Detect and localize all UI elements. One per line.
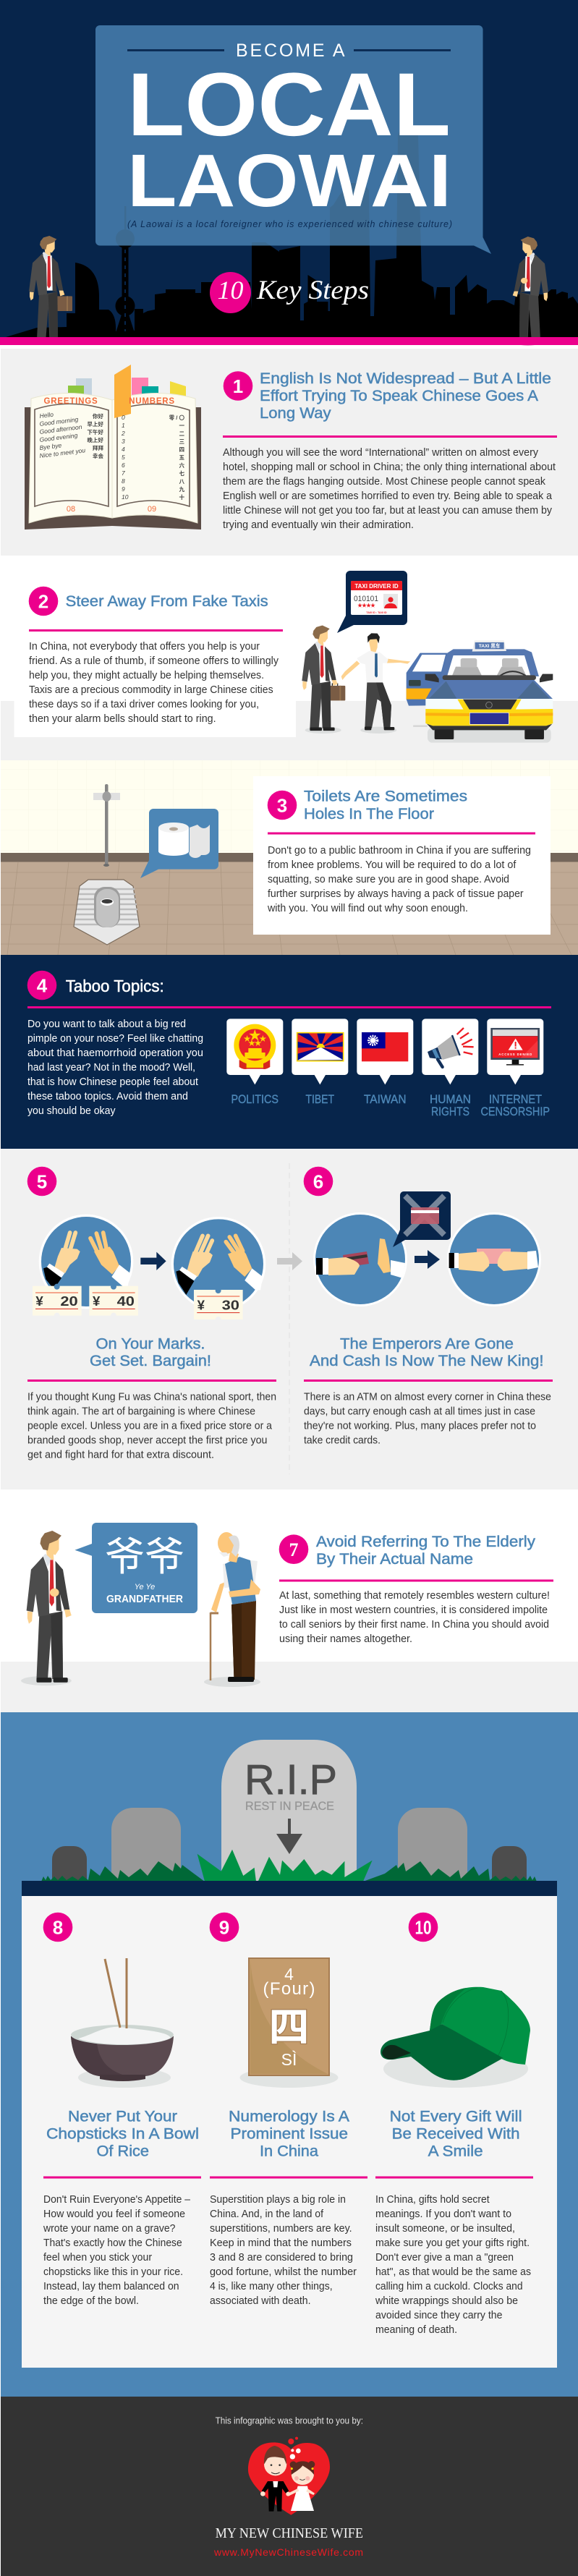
left businessman	[29, 236, 72, 344]
body: step 9: Keep in mind that the numbers	[210, 2237, 352, 2249]
card: access denied monitor	[487, 1019, 543, 1084]
price tags 20 and 40: ¥	[35, 1293, 43, 1309]
icon: phrase book: 7	[122, 469, 125, 477]
panel: step 3	[1, 760, 578, 955]
step number 10: 10	[415, 1917, 431, 1939]
heading: step 6: The Emperors Are Gone	[340, 1336, 514, 1353]
heading: step 5	[90, 1336, 211, 1369]
body: step 8: the edge of the bowl.	[43, 2295, 139, 2307]
body: step 2: Taxis are a precious commodity in large Chinese cities	[29, 684, 273, 696]
main tombstone: R.I.P	[245, 1756, 337, 1803]
body: step 10: avoided since they carry the	[375, 2309, 502, 2321]
step number 3	[268, 791, 297, 820]
body: step 2: In China, not everybody that offers you help is your	[29, 640, 260, 652]
icon: phrase book: 09	[148, 505, 156, 514]
body: step 8: feel when you stick your	[43, 2251, 152, 2263]
icon: phrase book: 0	[122, 414, 125, 421]
topic labels: RIGHTS	[431, 1105, 469, 1118]
body: step 8: wrote your name on a grave?	[43, 2222, 176, 2235]
icon: phrase book: GREETINGS	[44, 397, 98, 406]
body: step 8: How would you feel if someone	[43, 2208, 185, 2220]
topic labels: CENSORSHIP	[480, 1105, 550, 1118]
body: step 5: get and fight hard for that extra discount.	[27, 1449, 214, 1461]
illustration: cash exchange	[447, 1212, 541, 1306]
counter offer circle	[171, 1217, 265, 1322]
heading: step 6	[310, 1336, 544, 1369]
body: step 6: There is an ATM on almost every corner in China these	[304, 1391, 551, 1403]
body: step 1: Although you will see the word “International” written on almost every	[223, 446, 538, 459]
young man	[21, 1531, 72, 1686]
topic labels: TIBET	[305, 1092, 334, 1106]
main tombstone: REST IN PEACE	[245, 1799, 334, 1813]
icon: number four card: 四	[269, 1995, 310, 2054]
body: step 7: using their names altogether.	[279, 1633, 412, 1645]
body: step 3: squatting, so make sure you are in good shape. Avoid	[268, 873, 509, 885]
card: politics emblem: ★	[244, 1036, 251, 1044]
body: step 9: superstitions, numbers are key.	[210, 2222, 352, 2235]
body: step 6: days, but carry enough cash at all times just in case	[304, 1406, 535, 1418]
body: step 9: associated with death.	[210, 2295, 311, 2307]
price tags 20 and 40	[33, 1284, 138, 1319]
panel: step 4 taboo topics	[1, 955, 578, 1149]
title	[127, 41, 451, 222]
heading: step 7	[316, 1534, 536, 1568]
body: step 9: China. And, in the land of	[210, 2208, 324, 2220]
body: step 1	[223, 446, 556, 531]
step number 2: 2	[38, 590, 48, 612]
body: step 1: hotel, shopping mall or school in China; the only thing international about	[223, 461, 556, 473]
speech bubble: grandfather: Ye Ye	[135, 1583, 155, 1591]
body: step 1: little Chinese will not get you too far, but at least you can amuse them by	[223, 504, 552, 517]
old man	[204, 1532, 260, 1687]
body: step 4: these taboo topics. Avoid them and	[27, 1090, 188, 1102]
speech bubble: no credit cards	[393, 1191, 451, 1247]
heading: step 7: By Their Actual Name	[316, 1551, 473, 1568]
speech bubble: grandfather	[75, 1523, 197, 1613]
body: step 9	[210, 2193, 357, 2307]
heading: step 8: Of Rice	[97, 2143, 149, 2160]
step number 9: 9	[219, 1917, 229, 1939]
body: step 10: meanings. If you don't want to	[375, 2208, 511, 2220]
body: step 7: Just like in most western countries, it is considered impolite	[279, 1604, 548, 1616]
icon: phrase book: 2	[121, 430, 125, 437]
logo: couple in heart	[248, 2437, 330, 2515]
icon: number four card	[240, 1958, 339, 2088]
icon: phrase book: 七	[179, 469, 184, 477]
topic labels: HUMAN	[430, 1092, 471, 1106]
icon: phrase book: 8	[122, 477, 125, 485]
step number 1: 1	[233, 375, 243, 397]
city skyline	[6, 118, 578, 337]
icon: phrase book: NUMBERS	[129, 397, 175, 406]
icon: rice bowl with chopsticks	[71, 1958, 174, 2088]
main tombstone	[221, 1740, 357, 1882]
heading: step 10: Be Received With	[392, 2126, 519, 2143]
heading: step 10: Not Every Gift Will	[390, 2109, 522, 2125]
brand name: MY NEW CHINESE WIFE	[216, 2525, 363, 2541]
right businessman	[510, 237, 548, 345]
body: step 4	[27, 1018, 203, 1117]
heading: step 6: And Cash Is Now The New King!	[310, 1353, 544, 1369]
heading: step 7: Avoid Referring To The Elderly	[316, 1534, 536, 1550]
heading: step 8: Never Put Your	[68, 2109, 177, 2125]
medium graves	[111, 1808, 467, 1882]
body: step 3: from knee problems. You will be required to do a lot of	[268, 859, 517, 871]
icon: phrase book: 一	[179, 422, 184, 429]
heading: step 9: Prominent Issue	[230, 2126, 348, 2143]
card: megaphone	[422, 1019, 478, 1084]
bride	[286, 2461, 315, 2511]
body: step 2: these days so if a taxi driver comes looking for you,	[29, 698, 259, 710]
title: BECOME A	[236, 41, 345, 61]
heading: step 8	[46, 2109, 199, 2160]
card: politics emblem: ★	[255, 1040, 262, 1048]
subtitle: (A Laowai is a local foreigner who is experienced with chinese culture)	[127, 219, 452, 229]
taxi: TAXI 黑车	[479, 642, 501, 649]
body: step 10: insult someone, or be insulted,	[375, 2222, 515, 2235]
icon: phrase book: 9	[122, 485, 125, 493]
body: step 8: chopsticks like this in your rice.	[43, 2266, 183, 2278]
icon: phrase book: 八	[179, 478, 184, 485]
body: step 8	[43, 2193, 191, 2307]
body: step 10: calling him a cuckold. Clocks and	[375, 2280, 522, 2292]
illustration: bargaining hands	[33, 1215, 265, 1322]
heading: step 1: English Is Not Widespread – But A Little	[260, 370, 551, 387]
icon: phrase book: 1	[122, 422, 125, 429]
body: step 10: hat", as that would be the same as	[375, 2266, 531, 2278]
icon: phrase book: 幸会	[93, 452, 103, 459]
step number 6: 6	[313, 1170, 323, 1192]
body: step 3	[267, 844, 531, 914]
icon: phrase book: Bye bye	[39, 441, 62, 451]
title: LAOWAI	[127, 139, 451, 222]
icon: phrase book: 晚上好	[87, 436, 103, 443]
speech bubble: grandfather: 爷爷	[105, 1524, 184, 1582]
speech bubble: taxi driver id: TAXI ID : TAXI ID	[366, 611, 387, 614]
body: step 4: had last year? Not in the mood? Well,	[27, 1061, 195, 1074]
icon: phrase book: 你好	[93, 412, 103, 420]
speech bubble: toilet paper	[140, 809, 218, 878]
heading: step 10: A Smile	[428, 2143, 483, 2160]
icon: number four card: (Four)	[263, 1979, 315, 1999]
step number 8	[43, 1913, 72, 1942]
panel: step 1	[1, 349, 578, 556]
icon: phrase book: Hello	[39, 411, 54, 420]
price tags 20 and 40: ¥	[93, 1293, 101, 1309]
heading: step 9	[229, 2109, 349, 2160]
step number 4: 4	[37, 975, 48, 997]
body: step 8: That's exactly how the Chinese	[43, 2237, 182, 2249]
step number 4	[27, 971, 56, 1000]
header banner	[0, 0, 578, 345]
body: step 2	[29, 640, 279, 725]
body: step 5: branded goods shop, never accept the first price you	[27, 1434, 267, 1447]
step number 7: 7	[289, 1539, 298, 1560]
grass	[41, 1850, 537, 1882]
heading: step 2: Steer Away From Fake Taxis	[66, 593, 268, 610]
footer	[1, 2397, 578, 2576]
heading: step 9: Numerology Is A	[229, 2109, 349, 2125]
heading: step 3	[304, 788, 467, 822]
icon: phrase book: Good morning	[39, 415, 79, 428]
body: step 6	[304, 1391, 551, 1447]
body: step 7: At last, something that remotely resembles western culture!	[279, 1589, 550, 1602]
body: step 5: people excel. Unless you are in a fixed price store or a	[27, 1420, 273, 1432]
icon: phrase book: 九	[179, 485, 184, 493]
icon: phrase book: 08	[67, 505, 75, 514]
speech bubble: taxi driver id: ★★★★	[357, 603, 375, 608]
icon: phrase book: 十	[179, 493, 184, 501]
heading: step 1: Effort Trying To Speak Chinese Goes A	[260, 388, 538, 404]
icon: phrase book: 零 / 〇	[169, 415, 184, 421]
body: step 5	[27, 1391, 276, 1461]
step number 9	[210, 1913, 239, 1942]
heading: step 3: Toilets Are Sometimes	[304, 788, 467, 805]
heading: step 3: Holes In The Floor	[304, 806, 434, 822]
icon: phrase book: 3	[122, 438, 125, 445]
body: step 7	[279, 1589, 550, 1645]
heading: step 1: Long Way	[260, 405, 331, 422]
step number 8: 8	[53, 1917, 63, 1939]
arrow: gray separator	[277, 1252, 302, 1270]
card: tibet flag	[292, 1019, 348, 1084]
step number 5	[27, 1167, 56, 1196]
first offer circle	[39, 1215, 133, 1309]
step number 10	[409, 1913, 438, 1942]
icon: phrase book: Good afternoon	[39, 423, 82, 435]
body: step 4: you should be okay	[27, 1105, 116, 1117]
icon: phrase book: 4	[122, 446, 125, 453]
foreigner	[302, 625, 345, 734]
arrow	[140, 1252, 166, 1270]
step number 3: 3	[277, 794, 287, 816]
arrow	[415, 1250, 440, 1269]
taxi	[407, 640, 553, 743]
body: step 10	[375, 2193, 531, 2336]
body: step 5: If you thought Kung Fu was China's national sport, then	[27, 1391, 276, 1403]
price tags 20 and 40: 40	[117, 1293, 135, 1309]
body: step 7: to call seniors by their first name. In China you should avoid	[279, 1618, 549, 1631]
body: step 9: good fortune, whilst the number	[210, 2266, 357, 2278]
step number 7	[279, 1534, 308, 1564]
topic labels: INTERNET	[489, 1092, 542, 1106]
body: step 4: Do you want to talk about a big red	[27, 1018, 186, 1030]
speech bubble: taxi driver id: 010101	[354, 595, 378, 603]
heading: step 9: In China	[260, 2143, 318, 2160]
body: step 2: then your alarm bells should start to ring.	[29, 713, 216, 725]
panel: step 2	[1, 556, 578, 760]
body: step 1: trying and eventually win their admiration.	[223, 519, 414, 531]
speech bubble: taxi driver id	[337, 571, 407, 633]
pink band	[0, 337, 578, 345]
icon: phrase book: 6	[122, 462, 125, 469]
speech bubble: grandfather: GRANDFATHER	[106, 1594, 184, 1605]
card: politics emblem	[226, 1019, 283, 1084]
icon: phrase book: 早上好	[87, 420, 103, 428]
card: politics emblem: ★	[249, 1028, 261, 1042]
body: step 10: Don't ever give a man a "green	[375, 2251, 514, 2263]
body: step 10: make sure you get your gifts right.	[375, 2237, 530, 2249]
topic labels	[231, 1092, 550, 1118]
key steps badge	[210, 272, 369, 313]
icon: phrase book: 下午好	[87, 428, 103, 435]
body: step 2: help you, they might actually be helping themselves.	[29, 669, 264, 681]
panel: step 7	[1, 1489, 578, 1712]
step number 1	[224, 371, 252, 401]
website: www.MyNewChineseWife.com	[213, 2546, 363, 2558]
small graves	[52, 1846, 527, 1882]
body: step 2: friend. As a rule of thumb, if someone offers to willingly	[29, 655, 279, 667]
body: step 10: meaning of death.	[375, 2324, 457, 2336]
card: politics emblem: ★	[248, 1040, 255, 1048]
icon: phrase book: 10	[122, 493, 129, 501]
title: LOCAL	[127, 55, 451, 155]
body: step 3: with you. You will find out why soon enough.	[267, 902, 468, 914]
body: step 1: them are the flags hanging outside. Most Chinese people cannot speak	[223, 475, 545, 488]
card: politics emblem: ★	[259, 1036, 266, 1044]
panel: three rules card	[22, 1896, 557, 2368]
icon: phrase book: 拜拜	[93, 444, 103, 451]
icon: phrase book: Nice to meet you	[39, 446, 86, 459]
heading: step 8: Chopsticks In A Bowl	[46, 2126, 199, 2143]
card: taiwan flag	[357, 1019, 413, 1084]
footer credit: This infographic was brought to you by:	[216, 2416, 363, 2426]
step number 6	[304, 1167, 333, 1196]
heading: step 5: Get Set. Bargain!	[90, 1353, 211, 1369]
icon: pipe and flush	[93, 784, 120, 867]
icon: phrase book: 三	[179, 438, 184, 445]
step number 5: 5	[37, 1170, 47, 1192]
topic labels: POLITICS	[231, 1092, 279, 1106]
body: step 10: white wrappings should also be	[375, 2295, 518, 2307]
body: step 8: Don't Ruin Everyone's Appetite –	[43, 2193, 191, 2206]
body: step 8: Instead, lay them balanced on	[43, 2280, 179, 2292]
icon: green hat	[381, 1987, 530, 2088]
body: step 10: In China, gifts hold secret	[375, 2193, 490, 2206]
speech bubble	[95, 25, 491, 254]
heading: step 5: On Your Marks.	[95, 1336, 205, 1353]
key steps badge: Key Steps	[256, 276, 369, 305]
body: step 4: about that haemorrhoid operation you	[27, 1047, 203, 1059]
icon: phrase book: 五	[179, 454, 184, 461]
icon: phrase book: 六	[179, 462, 184, 469]
icon: number four card: 4	[284, 1965, 294, 1984]
icon: phrase book	[25, 365, 201, 530]
driver	[341, 633, 410, 734]
body: step 5: think again. The art of bargaining is where Chinese	[27, 1406, 255, 1418]
key steps badge: 10	[217, 276, 243, 305]
heading: step 10	[390, 2109, 522, 2160]
panel: graveyard and steps 8 to 10	[1, 1712, 578, 2397]
heading: step 1	[260, 370, 551, 422]
illustration: foreigner, driver and taxi	[302, 625, 553, 743]
price tags 20 and 40: 20	[60, 1293, 78, 1309]
body: step 4: pimple on your nose? Feel like chatting	[27, 1032, 203, 1045]
icon: squat toilet	[74, 880, 140, 945]
topic card icons	[226, 1019, 543, 1084]
panel: steps 5 and 6	[1, 1149, 578, 1489]
step number 2	[29, 587, 58, 616]
body: step 3: further surprises by always having a pack of tissue paper	[268, 888, 524, 900]
icon: phrase book: Good evening	[39, 432, 78, 443]
card: access denied monitor: ACCESS DENIED	[498, 1053, 532, 1056]
text card: step 3	[253, 776, 551, 935]
icon: phrase book: 5	[122, 454, 125, 461]
body: step 9: 4 is, like many other things,	[210, 2280, 333, 2292]
body: step 1: English well or are sometimes horrified to even try. Being able to speak a	[223, 490, 553, 502]
heading: step 4: Taboo Topics:	[66, 977, 164, 995]
illustration: card refused	[313, 1191, 451, 1306]
body: step 6: they're not working. Plus, many places prefer not to	[304, 1420, 536, 1432]
icon: number four card: SÌ	[281, 2050, 297, 2069]
body: step 6: take credit cards.	[304, 1434, 381, 1447]
groom	[260, 2446, 289, 2512]
body: step 4: that is how Chinese people feel about	[27, 1076, 199, 1088]
body: step 9: 3 and 8 are considered to bring	[210, 2251, 353, 2263]
body: step 9: Superstition plays a big role in	[210, 2193, 346, 2206]
icon: phrase book: 二	[179, 430, 184, 437]
counter offer circle: 30	[222, 1297, 239, 1312]
topic labels: TAIWAN	[364, 1092, 407, 1106]
speech bubble: taxi driver id: TAXI DRIVER ID	[354, 583, 399, 590]
icon: phrase book: 四	[179, 446, 184, 453]
body: step 3: Don't go to a public bathroom in China if you are suffering	[268, 844, 531, 856]
counter offer circle: ¥	[197, 1297, 205, 1312]
